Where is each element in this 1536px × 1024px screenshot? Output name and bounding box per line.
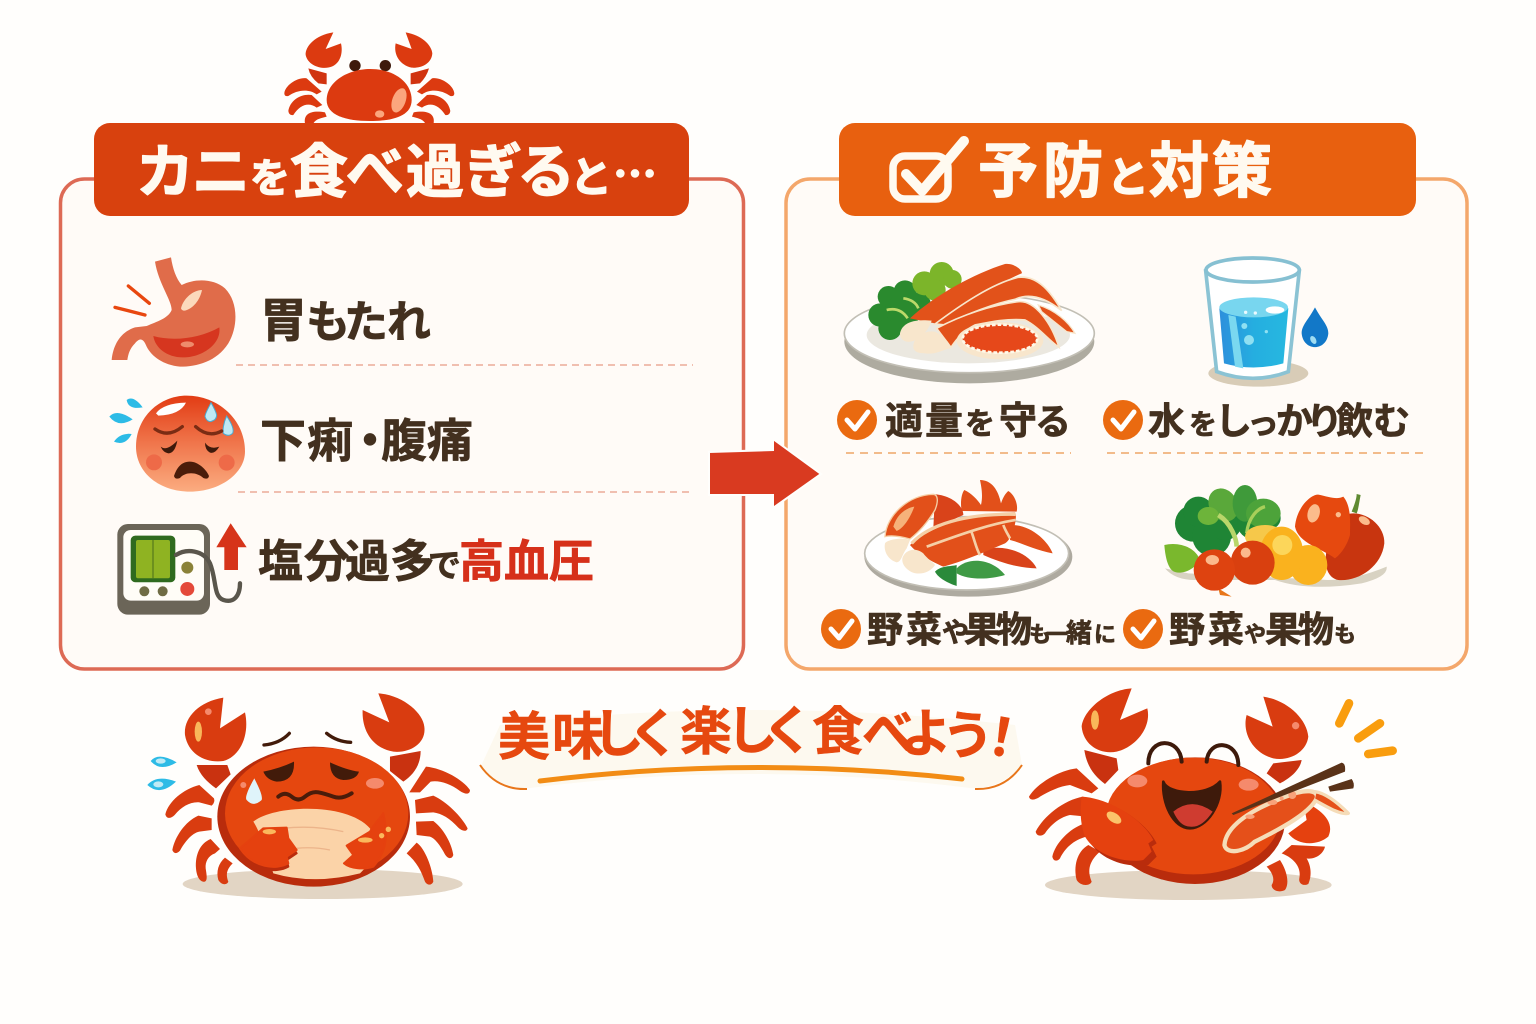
icon: second crab plate (864, 480, 1072, 597)
heading text: right: 予 (978, 138, 1038, 205)
header: right title (839, 123, 1416, 216)
crab meat (1227, 791, 1348, 849)
icon: crab plate (844, 262, 1094, 383)
icon: check (821, 609, 861, 649)
heading text: left: ぎ (464, 140, 522, 205)
heading text: right: 策 (1212, 138, 1272, 205)
item: stomach upset (112, 257, 431, 367)
label: high blood pressure: 過 (345, 536, 390, 587)
label: moderate amount: を (965, 408, 995, 441)
heading text: left: ニ (192, 140, 250, 205)
label: drink water: む (1373, 401, 1410, 442)
item: vegetables and fruit (1123, 483, 1387, 650)
icon: stomach (112, 257, 235, 367)
item: high blood pressure (117, 523, 594, 615)
character: worried crab (147, 693, 470, 899)
crab arm (1088, 800, 1157, 866)
label: diarrhea: 痢 (307, 415, 353, 467)
crab mouth (1163, 782, 1220, 828)
label: drink water: し (1215, 401, 1252, 442)
label: high blood pressure: 塩 (258, 536, 303, 587)
item: moderate amount (837, 262, 1094, 443)
crab face (263, 762, 359, 782)
ribbon ends (480, 765, 1022, 789)
icon: check (1123, 609, 1163, 649)
label: moderate amount: 量 (925, 401, 963, 443)
label: with vegetables and fruit: 果 (964, 609, 1000, 650)
crab eyes (1148, 743, 1238, 765)
item: with vegetables and fruit (821, 480, 1116, 650)
arrow: cause to prevention (709, 439, 821, 508)
label: moderate amount: る (1035, 401, 1071, 442)
crab body (1105, 757, 1285, 884)
label: with vegetables and fruit: 野 (867, 609, 903, 650)
heading text: left: カ (136, 140, 194, 205)
label: vegetables and fruit: も (1334, 622, 1356, 647)
heading text: right: と (1107, 154, 1149, 201)
panel: left (60, 179, 744, 669)
exclamation mark: ！ (971, 706, 1032, 772)
heading text: left: … (613, 139, 657, 203)
label: vegetables and fruit: 菜 (1208, 609, 1244, 650)
label: diarrhea: ・ (347, 415, 393, 467)
icon: top crab (284, 32, 454, 123)
label: high blood pressure: 分 (304, 536, 349, 587)
heading text: left: べ (346, 140, 404, 205)
slogan banner (480, 703, 1032, 789)
label: diarrhea: 痛 (427, 415, 473, 467)
label: high blood pressure: 圧 (549, 536, 594, 587)
label: stomach upset: れ (387, 298, 431, 347)
heading text: right: 対 (1149, 138, 1209, 205)
heading text: left: 過 (406, 140, 464, 205)
label: stomach upset: た (344, 298, 388, 347)
heading text: left: る (517, 140, 575, 205)
chopsticks front (1232, 763, 1345, 815)
label: vegetables and fruit: 果 (1265, 609, 1301, 650)
label: high blood pressure: で (428, 547, 461, 584)
label: drink water: 水 (1148, 401, 1185, 442)
header: left title (94, 123, 689, 216)
panel: right (786, 179, 1467, 669)
item: drink water (1103, 258, 1410, 442)
character: happy crab (1029, 688, 1393, 900)
ribbon line (540, 767, 962, 781)
slogan text: 美味しく楽しく食べよう (498, 703, 994, 767)
chopsticks back (1328, 779, 1354, 792)
label: moderate amount: 適 (885, 401, 923, 443)
icon: sick face (109, 396, 245, 492)
label: drink water: り (1306, 401, 1343, 442)
label: drink water: っ (1247, 405, 1279, 441)
label: with vegetables and fruit: も (1029, 622, 1051, 647)
label: drink water: 飲 (1336, 401, 1373, 442)
icon: check (837, 400, 877, 440)
heading text: left: 食 (290, 140, 348, 205)
label: vegetables and fruit: 野 (1169, 609, 1205, 650)
label: with vegetables and fruit: や (942, 618, 969, 648)
icon: vegetables and fruit (1164, 483, 1387, 597)
crab body (217, 747, 410, 887)
label: with vegetables and fruit: に (1094, 622, 1116, 647)
icon: checkbox (893, 141, 964, 199)
item: diarrhea and stomach ache (109, 396, 473, 492)
heading text: left: と (570, 154, 612, 201)
label: with vegetables and fruit: 物 (996, 609, 1032, 650)
icon: check (1103, 400, 1143, 440)
heading text: left: を (250, 157, 290, 201)
heading text: right: 防 (1043, 138, 1103, 205)
icon: water glass (1206, 258, 1328, 387)
label: diarrhea: 腹 (381, 415, 427, 467)
label: stomach upset: 胃 (260, 294, 307, 347)
label: vegetables and fruit: 物 (1298, 609, 1334, 650)
label: with vegetables and fruit: 緒 (1066, 618, 1092, 648)
excitement lines (1339, 703, 1393, 754)
label: diarrhea: 下 (260, 415, 306, 467)
label: stomach upset: も (306, 298, 350, 347)
label: high blood pressure: 血 (504, 536, 549, 587)
icon: blood pressure monitor (117, 523, 247, 615)
label: with vegetables and fruit: 一 (1046, 622, 1068, 647)
label: drink water: を (1189, 409, 1217, 440)
label: vegetables and fruit: や (1244, 622, 1266, 647)
label: high blood pressure: 多 (390, 536, 435, 587)
label: high blood pressure: 高 (459, 536, 504, 587)
label: with vegetables and fruit: 菜 (906, 609, 942, 650)
label: moderate amount: 守 (999, 401, 1037, 443)
label: drink water: か (1276, 401, 1313, 442)
